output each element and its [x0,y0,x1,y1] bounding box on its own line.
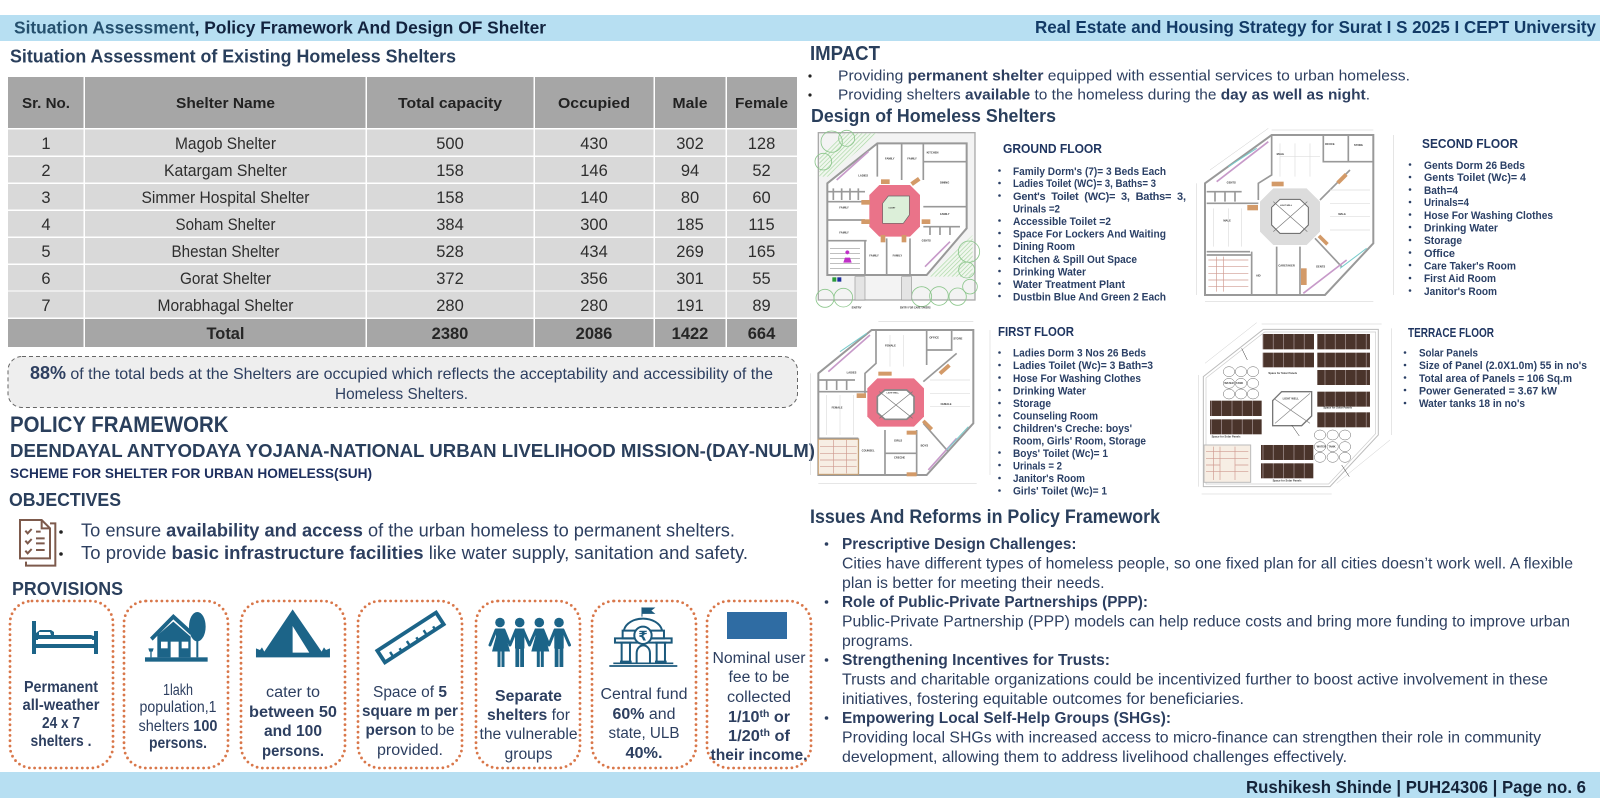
table header row: Total capacity [398,95,503,112]
provision card: funding: state, ULB [608,725,680,742]
provision card: population norm: 1lakh [163,682,193,699]
floor plan: first floor: COUNSEL [862,449,875,453]
provision card: space per person: person to be [366,722,454,739]
heading: policy framework: POLICY FRAMEWORK [10,412,229,437]
icon: blue rectangle [727,612,787,639]
table data rows: 165 [748,243,775,261]
floor list: first floor: FIRST FLOOR [998,324,1075,339]
provision card: space per person: square m per [362,703,458,720]
issue: incentives for trusts [842,652,1548,708]
icon: government building with rupee: ₹ [638,629,648,644]
table data rows: 2 [41,162,51,180]
floor plan: second floor: AID [1256,274,1261,278]
floor plan: ground floor: LADIES [858,174,868,178]
provision card: space per person [358,601,462,768]
table data rows: 191 [676,297,704,315]
heading: design of homeless shelters: Design of Homeless Shelters [811,106,1056,126]
heading: situation assessment: Situation Assessment of Existing Homeless Shelters [10,46,456,66]
floor plan: first floor [811,322,990,483]
issue: public-private partnerships: Public-Private Partnership (PPP) models can help reduce costs and bring more funding to improve urban [842,614,1570,630]
issues and reforms list [825,536,1573,766]
floor list: terrace floor: TERRACE FLOOR [1408,325,1494,340]
floor list: ground floor: Space For Lockers And Waiting [1013,228,1166,240]
provision card: user fee: of [770,728,791,745]
provision card: funding: 60% and [612,706,676,723]
provision card: permanent shelters: shelters . [30,733,92,750]
floor plan: ground floor: DINING [940,180,949,184]
provision card: separate shelters: groups [504,746,553,763]
impact list: Providing permanent shelter equipped with essential services to urban homeless. [838,68,1410,84]
floor list: second floor: Care Taker's Room [1424,260,1516,272]
floor plan: ground floor: FAMILY [907,156,917,160]
floor list: ground floor: Dustbin Blue And Green 2 Each [1013,292,1166,304]
floor list: first floor: Janitor's Room [1013,473,1085,485]
table data rows: Simmer Hospital Shelter [142,189,310,207]
provision card: population norm [124,601,228,768]
floor list: ground floor: Drinking Water [1013,266,1087,278]
floor plan: second floor: MALE [1338,212,1346,216]
table header row [22,95,788,112]
floor plan: first floor: CRECHE [894,455,905,459]
impact list [808,68,1410,104]
table data rows: 94 [681,162,699,180]
table data rows: 115 [748,216,775,234]
provision card: user fee: fee to be [728,669,790,686]
table total row [206,325,776,343]
table data rows: Magob Shelter [175,135,276,153]
floor list: first floor: Children's Creche: boys' [1013,423,1132,435]
table: existing homeless shelters [8,77,797,347]
floor list: ground floor: Gent's Toilet (WC)= 3, Baths= 3, [1013,191,1186,203]
floor list: terrace floor: Size of Panel (2.0X1.0m) 55 in no's [1419,360,1587,372]
callout: 88% occupancy [8,356,798,408]
floor plan: terrace floor: TANK [1236,381,1243,385]
floor list: first floor: Storage [1013,398,1051,410]
issue: public-private partnerships: programs. [842,633,913,650]
floor plan: terrace floor [1198,323,1392,494]
provision card: user fee: 1/10 [728,709,758,726]
table total row: 1422 [672,325,708,343]
floor list: first floor: Ladies Dorm 3 Nos 26 Beds [1013,348,1146,360]
provision card: capacity: cater to [266,684,320,701]
floor list: terrace floor: Power Generated = 3.67 kW [1419,386,1558,398]
provision card: separate shelters: shelters for [487,707,570,724]
icon: bed [32,621,98,654]
issue: self-help groups: Providing local SHGs with increased access to micro-finance can strengthen their role in community [842,730,1541,746]
table data rows: 158 [436,189,464,207]
floor list: first floor: Drinking Water [1013,386,1087,398]
floor list: first floor: Ladies Toilet (Wc)= 3 Bath=3 [1013,360,1153,372]
floor plan: ground floor: COURT [888,207,896,209]
floor plan: ground floor: FAMILY [940,212,950,216]
floor list: second floor: Storage [1424,235,1462,247]
floor list: second floor: Urinals=4 [1424,197,1470,209]
provision card: user fee: or [769,709,790,726]
table data rows: 269 [676,243,704,261]
table data rows: 3 [41,189,51,207]
icon: ruler [377,613,444,662]
floor plan: ground floor: FAMILY [839,230,849,234]
table data rows: 5 [41,243,51,261]
heading: objectives: OBJECTIVES [9,490,121,510]
floor list: first floor: Counseling Room [1013,410,1098,422]
issue: incentives for trusts: Trusts and charitable organizations could be incentivized further to boost active involvement in these [842,672,1548,688]
heading: impact: IMPACT [810,43,880,65]
provision card: capacity: between 50 [249,704,337,721]
floor list: first floor: Boys' Toilet (Wc)= 1 [1013,448,1108,460]
table data rows: Soham Shelter [176,216,276,234]
floor plan: second floor: MALE [1223,219,1231,223]
floor plan: first floor: LADIES [847,370,857,374]
floor plan: ground floor: KITCHEN [927,150,939,154]
floor plan: first floor: FEMALE [885,344,896,348]
provision card: space per person: provided. [377,742,443,759]
floor list: ground floor: Ladies Toilet (WC)= 3, Baths= 3 [1013,178,1156,190]
floor plan: ground floor: FAMILY [839,205,849,209]
floor plan: terrace floor: LIGHT WELL [1283,396,1299,400]
provision card: separate shelters: the vulnerable [480,726,578,743]
provision card: user fee: 1/20 [728,728,758,745]
floor plan: second floor: LIGHT WELL [1280,205,1293,207]
footer credit: Rushikesh Shinde | PUH24306 | Page no. 6 [1246,777,1586,797]
provision card: capacity: and 100 [264,723,322,740]
floor list: second floor [1409,136,1553,298]
heading: provisions: PROVISIONS [12,579,123,599]
provision card: permanent shelters: all-weather [22,697,100,714]
provision card: user fee: Nominal user [712,650,806,667]
floor plan: terrace floor: Space for Solar Panels [1268,371,1298,375]
table data rows: 430 [580,135,608,153]
table data rows: 302 [676,135,704,153]
floor list: second floor: Office [1424,248,1455,260]
provision card: user fee: collected [727,689,791,706]
table header row: Female [735,95,788,112]
issue: prescriptive design [842,536,1573,592]
table data rows: 55 [752,270,771,288]
floor list: first floor: Girls' Toilet (Wc)= 1 [1013,486,1107,498]
table data rows: Bhestan Shelter [172,243,280,261]
floor list: second floor: Gents Toilet (Wc)= 4 [1424,172,1527,184]
floor list: second floor: SECOND FLOOR [1422,136,1519,151]
table header row: Occupied [558,95,630,112]
objectives list: To provide basic infrastructure facilities like water supply, sanitation and safety. [81,543,748,563]
provision card: capacity: persons. [262,743,324,760]
provision card: user fee [707,601,811,768]
table data rows: 280 [580,297,608,315]
table data rows: 140 [580,189,608,207]
issue: self-help groups [842,710,1541,766]
footer band [0,772,1600,798]
provision card: permanent shelters: 24 x 7 [42,715,80,732]
provision card: permanent shelters: Permanent [24,679,98,696]
table data rows: 6 [41,270,51,288]
provision card: separate shelters: Separate [495,688,562,705]
floor plan: second floor: GENTS [1227,180,1236,184]
provision card: user fee: their income. [710,747,808,764]
header title left: Situation Assessment, Policy Framework And Design OF Shelter [14,18,546,38]
issue: prescriptive design: Prescriptive Design Challenges: [842,536,1076,553]
floor list: terrace floor: Total area of Panels = 106 Sq.m [1419,373,1572,385]
issue: self-help groups: development, allowing them to address livelihood challenges effectively. [842,749,1347,766]
floor plan: first floor: GIRLS [894,439,902,443]
floor list: ground floor: Dining Room [1013,241,1075,253]
icon: checklist [20,520,55,566]
objectives list: To ensure availability and access of the urban homeless to permanent shelters. [81,520,735,540]
floor plan: ground floor: FAMILY [869,254,879,258]
floor list: first floor: Urinals = 2 [1013,460,1062,472]
issue: prescriptive design: plan is better for meeting their needs. [842,575,1104,592]
table header row: Shelter Name [176,95,275,112]
table total row: 664 [748,325,776,343]
table data rows: 384 [436,216,464,234]
floor plan: first floor: BOYS [921,444,928,448]
floor plan: terrace floor: WATER [1224,381,1234,385]
header title right: Real Estate and Housing Strategy for Surat I S 2025 I CEPT University [1035,17,1596,37]
floor list: ground floor: Urinals =2 [1013,204,1060,216]
table data rows: 1 [41,135,51,153]
provision card: permanent shelters [10,601,113,768]
provision card: space per person: Space of 5 [373,684,447,701]
floor plan: first floor: STORE [953,336,963,340]
provision card: separate shelters [476,601,580,768]
provision card: user fee: th [759,709,769,720]
table data rows [41,135,775,315]
table data rows: 52 [752,162,771,180]
table data rows: Morabhagal Shelter [158,297,294,315]
provision card: funding [592,601,696,768]
provision card: funding: 40%. [626,745,662,762]
floor list: second floor: Drinking Water [1424,222,1499,234]
issue: public-private partnerships: Role of Public-Private Partnerships (PPP): [842,594,1148,611]
icon: group of people [490,618,570,667]
floor plan: first floor: LIGHT WELL [887,392,900,394]
floor plan: terrace floor: Space for Solar Panels [1273,479,1302,483]
floor list: terrace floor [1404,325,1587,410]
table data rows: 146 [580,162,608,180]
table data rows: 89 [752,297,771,315]
floor plan: terrace floor: TANK [1328,444,1336,448]
table data rows: 60 [752,189,771,207]
table data rows: 528 [436,243,464,261]
provision card: population norm: population,1 [140,699,216,716]
table data rows: Gorat Shelter [180,270,271,288]
issue: prescriptive design: Cities have different types of homeless people, so one fixed plan for all cities doesn’t work well. A flexible [842,556,1573,572]
floor list: ground floor [998,141,1186,304]
table data rows: 128 [748,135,775,153]
floor plan: second floor: OFFICE [1325,142,1335,146]
impact list: Providing shelters available to the homeless during the day as well as night . [838,86,1370,104]
heading: DAY-NULM: DEENDAYAL ANTYODAYA YOJANA-NATIONAL URBAN LIVELIHOOD MISSION-(DAY-NULM) [10,441,815,461]
provision card: funding: Central fund [600,686,688,703]
table data rows: 280 [436,297,464,315]
table data rows: 300 [580,216,608,234]
floor list: ground floor: GROUND FLOOR [1003,141,1103,156]
floor plan: first floor: FEMALE [941,402,952,406]
table data rows: 434 [580,243,608,261]
table data rows: 4 [41,216,51,234]
provision card: capacity [241,601,345,768]
table header row: Male [672,95,708,112]
icon: house and tree [145,612,208,662]
floor plan: second floor: MALE [1277,152,1284,156]
floor plan: ground floor: ENTRY FOR CARE TAKERS [900,306,931,309]
floor list: second floor: Janitor's Room [1424,286,1497,298]
floor plan: second floor: CARETAKER [1278,264,1295,268]
floor plan: terrace floor: Space for Solar Panels [1212,434,1241,438]
floor list: second floor: Bath=4 [1424,185,1459,197]
floor list: ground floor: Accessible Toilet =2 [1013,216,1111,228]
table total row: Total [206,325,244,343]
floor plan: second floor: GENTS [1316,264,1325,268]
floor list: terrace floor: Solar Panels [1419,348,1478,360]
floor list: first floor: Room, Girls' Room, Storage [1013,436,1146,448]
issue: public-private partnerships [842,594,1570,650]
floor plan: ground floor [815,130,980,309]
table data rows: 301 [676,270,704,288]
table data rows: 158 [436,162,464,180]
floor plan: terrace floor: Space for Solar Panels [1323,406,1353,410]
floor plan: first floor: FEMALE [832,405,843,409]
objectives list [59,520,748,563]
floor list: ground floor: Water Treatment Plant [1013,279,1125,291]
table total row: 2086 [576,325,612,343]
provision card: population norm: shelters 100 [138,718,218,735]
floor plan: ground floor: GENTS [922,239,931,243]
table data rows: 185 [676,216,704,234]
floor plan: ground floor: FAMILY [893,254,902,258]
table data rows: 7 [41,297,51,315]
table data rows: 80 [681,189,699,207]
provision card: population norm: persons. [149,735,207,752]
floor plan: ground floor: FAMILY [885,156,895,160]
floor list: terrace floor: Water tanks 18 in no's [1419,398,1525,410]
table data rows: 500 [436,135,464,153]
floor plan: second floor: STORE [1354,143,1363,147]
heading: issues and reforms: Issues And Reforms in Policy Framework [810,507,1160,528]
icon: government building with rupee [609,607,677,666]
callout: 88% occupancy: Homeless Shelters. [335,386,468,403]
floor list: second floor: First Aid Room [1424,273,1496,285]
issue: incentives for trusts: initiatives, fostering equitable outcomes for beneficiaries. [842,691,1244,708]
floor plan: ground floor: ENTRY [852,305,862,309]
header band [0,15,1600,41]
floor list: second floor: Gents Dorm 26 Beds [1424,160,1525,172]
floor plan: first floor: OFFICE [929,335,939,339]
heading: SUH scheme: SCHEME FOR SHELTER FOR URBAN HOMELESS(SUH) [10,465,372,481]
floor list: first floor: Hose For Washing Clothes [1013,373,1141,385]
issue: incentives for trusts: Strengthening Incentives for Trusts: [842,652,1110,669]
icon: tent [256,609,330,657]
table data rows: 356 [580,270,608,288]
callout: 88% occupancy: 88% of the total beds at the Shelters are occupied which reflects the acceptability and accessibility of the [30,363,773,383]
floor list: first floor [998,324,1153,498]
floor list: second floor: Hose For Washing Clothes [1424,210,1553,222]
floor plan: second floor [1197,128,1393,302]
floor list: ground floor: Kitchen & Spill Out Space [1013,254,1137,266]
table data rows: 372 [436,270,464,288]
table data rows: Katargam Shelter [164,162,287,180]
table header row: Sr. No. [22,95,70,112]
floor list: ground floor: Family Dorm's (7)= 3 Beds Each [1013,166,1166,178]
table total row: 2380 [432,325,468,343]
floor plan: terrace floor: WATER [1317,444,1326,448]
provision card: user fee: th [760,728,770,739]
issue: self-help groups: Empowering Local Self-Help Groups (SHGs): [842,710,1171,727]
